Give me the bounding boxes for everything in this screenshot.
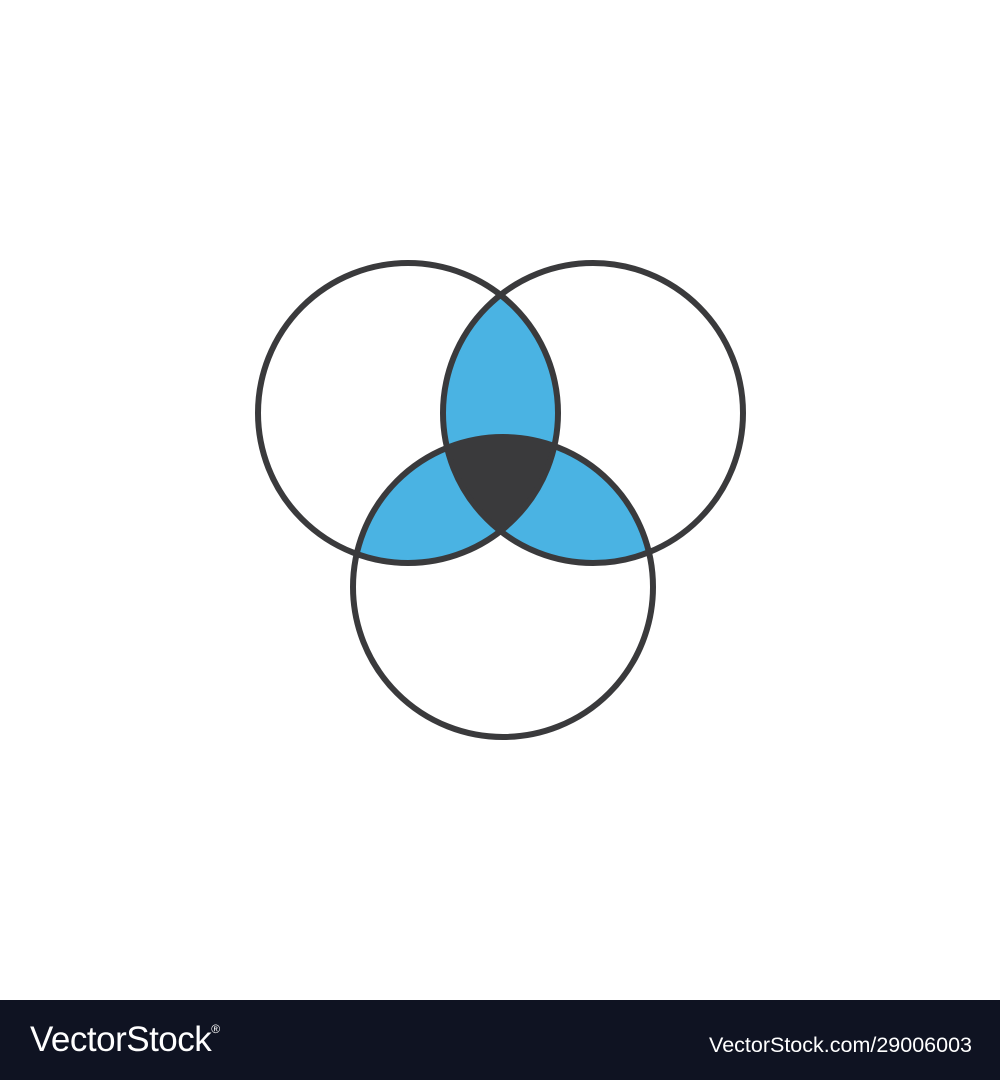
dark centre overlap bbox=[450, 440, 551, 528]
blue overlap regions bbox=[360, 298, 646, 560]
circle outlines bbox=[258, 263, 743, 737]
venn diagram bbox=[255, 260, 746, 740]
footer bar bbox=[0, 1000, 1000, 1080]
image url: VectorStock.com/29006003 bbox=[709, 1033, 972, 1057]
brand logo text: VectorStock® bbox=[30, 1020, 220, 1059]
